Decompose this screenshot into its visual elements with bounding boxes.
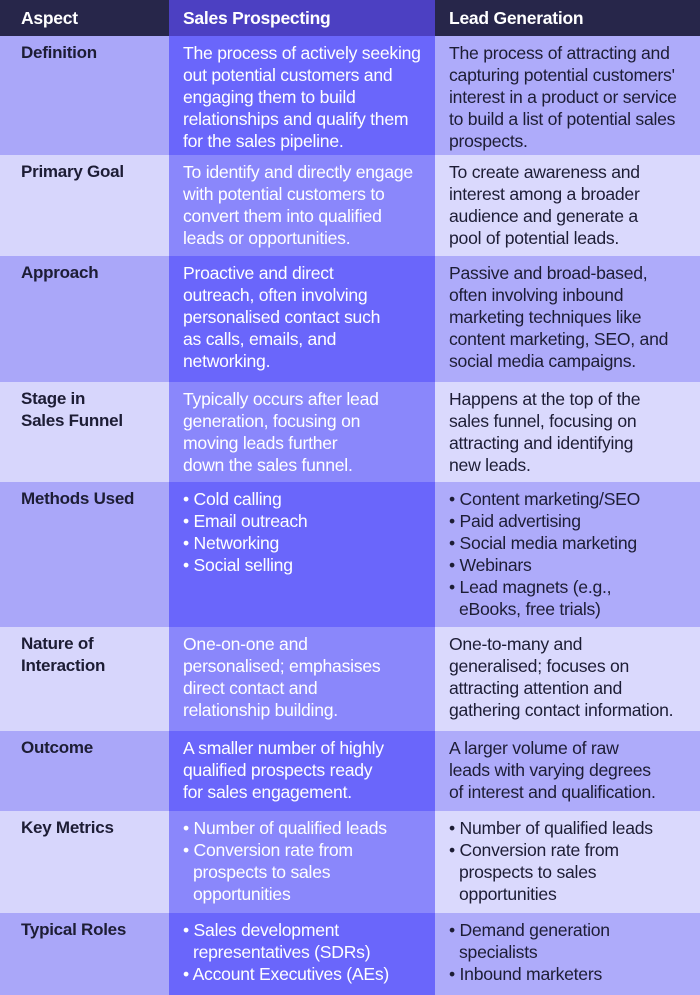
- text: Typically occurs after lead: [183, 389, 379, 409]
- text: qualified prospects ready: [183, 760, 372, 780]
- row: nature of interaction: [0, 627, 700, 731]
- text: to build a list of potential sales: [449, 109, 675, 129]
- text: for sales engagement.: [183, 782, 352, 802]
- text: generalised; focuses on: [449, 656, 629, 676]
- text: marketing techniques like: [449, 307, 641, 327]
- row: primary goal: [0, 155, 700, 256]
- text: • Demand generation: [449, 920, 610, 940]
- text: To identify and directly engage: [183, 162, 413, 182]
- text: audience and generate a: [449, 206, 638, 226]
- text: Methods Used: [21, 489, 134, 508]
- text: out potential customers and: [183, 65, 392, 85]
- text: new leads.: [449, 455, 531, 475]
- text: prospects to sales: [459, 862, 596, 882]
- text: outreach, often involving: [183, 285, 367, 305]
- row: methods used: [0, 482, 700, 627]
- text: • Paid advertising: [449, 511, 581, 531]
- row: definition: [0, 36, 700, 155]
- text: often involving inbound: [449, 285, 623, 305]
- text: relationships and qualify them: [183, 109, 408, 129]
- text: social media campaigns.: [449, 351, 636, 371]
- text: A larger volume of raw: [449, 738, 619, 758]
- text: • Email outreach: [183, 511, 307, 531]
- row: approach: [0, 256, 700, 382]
- text: The process of actively seeking: [183, 43, 421, 63]
- text: • Cold calling: [183, 489, 282, 509]
- text: Outcome: [21, 738, 93, 757]
- text: leads or opportunities.: [183, 228, 350, 248]
- text: personalised contact such: [183, 307, 380, 327]
- text: Definition: [21, 43, 97, 62]
- text: content marketing, SEO, and: [449, 329, 668, 349]
- text: One-on-one and: [183, 634, 308, 654]
- header: aspect: Aspect: [21, 8, 78, 28]
- text: • Conversion rate from: [183, 840, 353, 860]
- text: of interest and qualification.: [449, 782, 656, 802]
- text: Sales Funnel: [21, 411, 123, 430]
- text: Approach: [21, 263, 98, 282]
- text: engaging them to build: [183, 87, 356, 107]
- text: Stage in: [21, 389, 85, 408]
- text: generation, focusing on: [183, 411, 360, 431]
- row: outcome: [0, 731, 700, 811]
- text: opportunities: [193, 884, 290, 904]
- text: attracting and identifying: [449, 433, 633, 453]
- text: for the sales pipeline.: [183, 131, 344, 151]
- text: One-to-many and: [449, 634, 582, 654]
- text: • Webinars: [449, 555, 532, 575]
- text: The process of attracting and: [449, 43, 670, 63]
- text: prospects.: [449, 131, 528, 151]
- text: • Number of qualified leads: [183, 818, 387, 838]
- text: Interaction: [21, 656, 105, 675]
- row: stage in funnel: [0, 382, 700, 482]
- text: down the sales funnel.: [183, 455, 353, 475]
- text: Passive and broad-based,: [449, 263, 647, 283]
- text: gathering contact information.: [449, 700, 673, 720]
- text: leads with varying degrees: [449, 760, 651, 780]
- header: sales prospecting: Sales Prospecting: [183, 8, 330, 28]
- text: Happens at the top of the: [449, 389, 640, 409]
- text: Key Metrics: [21, 818, 114, 837]
- text: interest among a broader: [449, 184, 640, 204]
- text: opportunities: [459, 884, 556, 904]
- text: personalised; emphasises: [183, 656, 380, 676]
- text: • Conversion rate from: [449, 840, 619, 860]
- header row: [0, 0, 700, 36]
- text: capturing potential customers': [449, 65, 675, 85]
- text: representatives (SDRs): [193, 942, 370, 962]
- text: • Inbound marketers: [449, 964, 602, 984]
- text: Typical Roles: [21, 920, 126, 939]
- text: convert them into qualified: [183, 206, 382, 226]
- text: • Social media marketing: [449, 533, 637, 553]
- header: sales prospecting: [169, 0, 435, 36]
- text: • Account Executives (AEs): [183, 964, 389, 984]
- text: Primary Goal: [21, 162, 124, 181]
- text: prospects to sales: [193, 862, 330, 882]
- row: key metrics: [0, 811, 700, 913]
- text: sales funnel, focusing on: [449, 411, 636, 431]
- text: • Lead magnets (e.g.,: [449, 577, 611, 597]
- text: as calls, emails, and: [183, 329, 336, 349]
- text: eBooks, free trials): [459, 599, 601, 619]
- text: pool of potential leads.: [449, 228, 619, 248]
- text: • Sales development: [183, 920, 339, 940]
- text: A smaller number of highly: [183, 738, 384, 758]
- text: Nature of: [21, 634, 93, 653]
- text: interest in a product or service: [449, 87, 677, 107]
- text: • Social selling: [183, 555, 293, 575]
- row: typical roles: [0, 913, 700, 995]
- text: direct contact and: [183, 678, 317, 698]
- text: attracting attention and: [449, 678, 622, 698]
- text: moving leads further: [183, 433, 337, 453]
- text: specialists: [459, 942, 537, 962]
- text: relationship building.: [183, 700, 338, 720]
- text: with potential customers to: [183, 184, 385, 204]
- text: • Number of qualified leads: [449, 818, 653, 838]
- text: • Networking: [183, 533, 279, 553]
- header: lead generation: Lead Generation: [449, 8, 583, 28]
- text: • Content marketing/SEO: [449, 489, 640, 509]
- text: networking.: [183, 351, 270, 371]
- header: lead generation: [435, 0, 700, 36]
- text: Proactive and direct: [183, 263, 334, 283]
- header: aspect: [0, 0, 169, 36]
- text: To create awareness and: [449, 162, 640, 182]
